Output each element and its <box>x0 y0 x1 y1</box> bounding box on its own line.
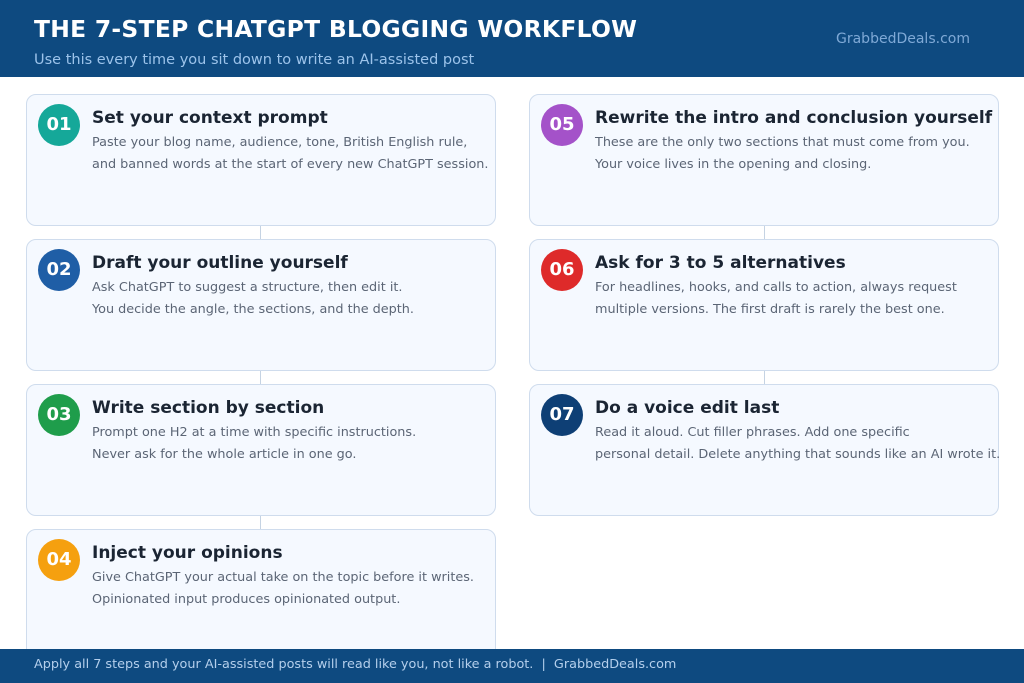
step text 01 <box>92 135 488 172</box>
brand: GrabbedDeals.com <box>836 31 970 47</box>
step title 02: Draft your outline yourself <box>92 253 348 273</box>
connector <box>260 516 261 530</box>
step text 01: Paste your blog name, audience, tone, British English rule, <box>92 135 467 150</box>
step text 01: and banned words at the start of every new ChatGPT session. <box>92 157 488 172</box>
icon: number 07: 07 <box>549 404 575 425</box>
icon: number 05: 05 <box>549 114 575 135</box>
footer text: Apply all 7 steps and your AI-assisted posts will read like you, not like a robot. | GrabbedDeals.com <box>34 657 676 672</box>
step title 07: Do a voice edit last <box>595 398 779 418</box>
step text 02: You decide the angle, the sections, and the depth. <box>92 302 414 317</box>
step text 02: Ask ChatGPT to suggest a structure, then edit it. <box>92 280 402 295</box>
title: THE 7-STEP CHATGPT BLOGGING WORKFLOW <box>34 15 637 43</box>
connector <box>260 226 261 240</box>
connector <box>764 226 765 240</box>
connector <box>260 371 261 385</box>
icon: number 04 <box>38 539 80 581</box>
step text 05 <box>594 135 970 172</box>
step text 06: multiple versions. The first draft is rarely the best one. <box>595 302 945 317</box>
step text 04 <box>92 570 474 607</box>
icon: number 03: 03 <box>46 404 72 425</box>
icon: number 06: 06 <box>549 259 575 280</box>
card: step 02 <box>26 239 496 371</box>
step text 03 <box>92 425 416 462</box>
step text 07: personal detail. Delete anything that sounds like an AI wrote it. <box>595 447 1000 462</box>
card: step 05 <box>529 94 999 226</box>
step text 03: Never ask for the whole article in one go. <box>92 447 356 462</box>
step text 06 <box>595 280 957 317</box>
icon: number 01 <box>38 104 80 146</box>
step text 04: Give ChatGPT your actual take on the topic before it writes. <box>92 570 474 585</box>
step text 07 <box>595 425 1000 462</box>
step title 05: Rewrite the intro and conclusion yourself <box>595 108 992 128</box>
step text 05: Your voice lives in the opening and closing. <box>595 157 871 172</box>
subtitle: Use this every time you sit down to write an AI-assisted post <box>34 52 474 68</box>
step title 03: Write section by section <box>92 398 324 418</box>
header <box>0 0 1024 77</box>
step text 04: Opinionated input produces opinionated output. <box>92 592 400 607</box>
card: step 04 <box>26 529 496 661</box>
card: step 03 <box>26 384 496 516</box>
step title 06: Ask for 3 to 5 alternatives <box>595 253 846 273</box>
icon: number 06 <box>541 249 583 291</box>
icon: number 05 <box>541 104 583 146</box>
step text 02 <box>92 280 414 317</box>
step title 01: Set your context prompt <box>92 108 328 128</box>
icon: number 01: 01 <box>46 114 72 135</box>
step text 06: For headlines, hooks, and calls to action, always request <box>595 280 957 295</box>
step text 03: Prompt one H2 at a time with specific instructions. <box>92 425 416 440</box>
icon: number 03 <box>38 394 80 436</box>
icon: number 04: 04 <box>46 549 72 570</box>
card: step 06 <box>529 239 999 371</box>
connector <box>764 371 765 385</box>
footer <box>0 649 1024 683</box>
icon: number 02 <box>38 249 80 291</box>
step text 05: These are the only two sections that must come from you. <box>595 135 970 150</box>
card: step 07 <box>529 384 999 516</box>
step text 07: Read it aloud. Cut filler phrases. Add one specific <box>595 425 910 440</box>
icon: number 02: 02 <box>46 259 72 280</box>
icon: number 07 <box>541 394 583 436</box>
card: step 01 <box>26 94 496 226</box>
step title 04: Inject your opinions <box>92 543 283 563</box>
